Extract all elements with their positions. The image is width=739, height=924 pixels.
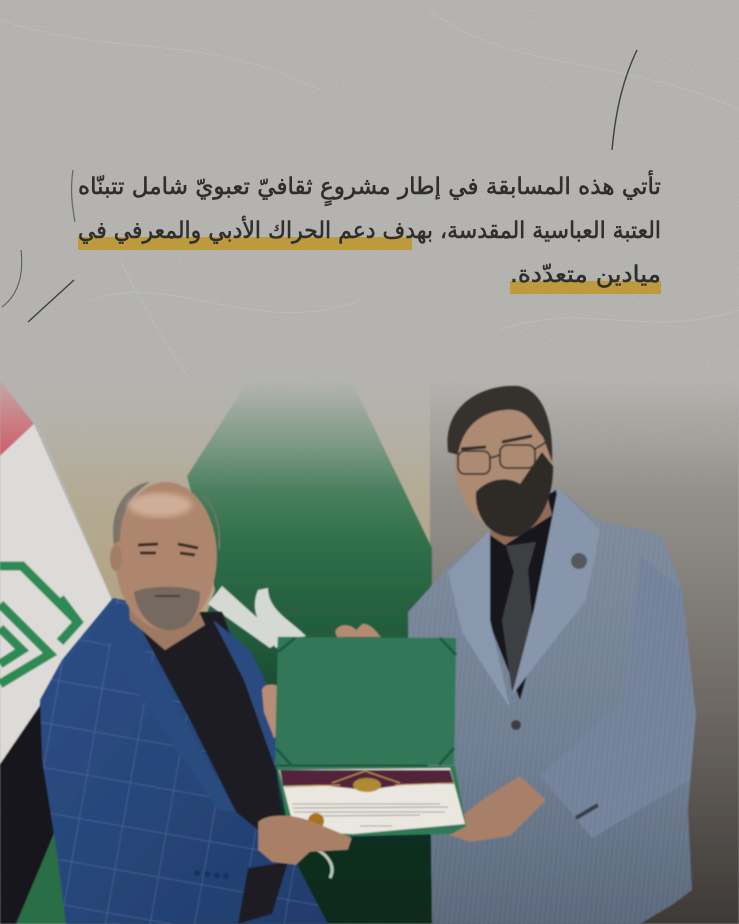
faded wall and banners: [20, 378, 739, 924]
man on the right: [408, 386, 696, 924]
gray wall: [428, 378, 739, 924]
suit: [408, 488, 696, 924]
text line three: ميادين متعدّدة.: [510, 262, 661, 288]
left hand holding folder: [262, 684, 284, 738]
highlight bar line two: [78, 237, 412, 250]
tie: [502, 542, 536, 692]
text line two: العتبة العباسية المقدسة، بهدف دعم الحراك الأدبي والمعرفي في: [78, 216, 661, 244]
gold header line: [283, 771, 454, 787]
hair side: [113, 482, 220, 550]
glasses: [458, 441, 548, 474]
left man's hand: [258, 815, 352, 865]
jacket button: [511, 720, 521, 730]
sleeve: [540, 555, 696, 838]
lips: [155, 595, 180, 597]
highlight bar line three: [510, 281, 661, 294]
headline text: [78, 170, 661, 288]
eyebrows: [461, 436, 532, 449]
lapels: [512, 488, 600, 695]
corner straps: [276, 638, 456, 765]
shirt lower part: [238, 862, 288, 924]
eyes and brows: [138, 544, 198, 555]
flag green script: [0, 566, 78, 684]
face: [455, 396, 551, 528]
neck: [128, 590, 205, 650]
gold crest: [353, 778, 381, 792]
text line one: تأتي هذه المسابقة في إطار مشروعٍ ثقافيّ تعبويّ شامل تتبنّاه: [78, 170, 661, 207]
flag white stripe: [0, 424, 112, 764]
flag red stripe: [0, 380, 34, 456]
lower green cover: [276, 766, 466, 838]
certificate text lines: [292, 804, 448, 826]
sleeve buttons: [576, 805, 598, 818]
beard: [476, 452, 553, 537]
right hand: [442, 776, 546, 842]
blue checked jacket: [40, 598, 328, 924]
upper green cover: [275, 637, 456, 765]
man on the left: [40, 482, 328, 924]
black shirt: [490, 490, 566, 700]
sleeve buttons: [194, 870, 229, 879]
small white script lower: [318, 850, 332, 878]
certificate folder: [258, 624, 466, 865]
beige panels: [39, 412, 430, 612]
black shirt: [132, 612, 282, 830]
hair: [447, 386, 552, 462]
lapel pin: [571, 553, 587, 569]
right lapel: [213, 620, 276, 770]
face: [115, 482, 217, 630]
photo backdrop: [0, 378, 739, 924]
banner white script: [208, 586, 306, 648]
green banner shape: [100, 378, 432, 924]
stubble: [134, 587, 200, 630]
jacket lapel: [106, 598, 236, 812]
fingers above folder: [335, 624, 381, 637]
green lower left stripe: [14, 808, 120, 924]
head highlight: [128, 493, 192, 517]
white certificate: [279, 768, 465, 834]
maroon header: [280, 770, 454, 790]
neck: [490, 490, 552, 545]
gold seal: [308, 813, 324, 829]
ears: [110, 545, 122, 571]
flag black stripe: [0, 676, 60, 924]
